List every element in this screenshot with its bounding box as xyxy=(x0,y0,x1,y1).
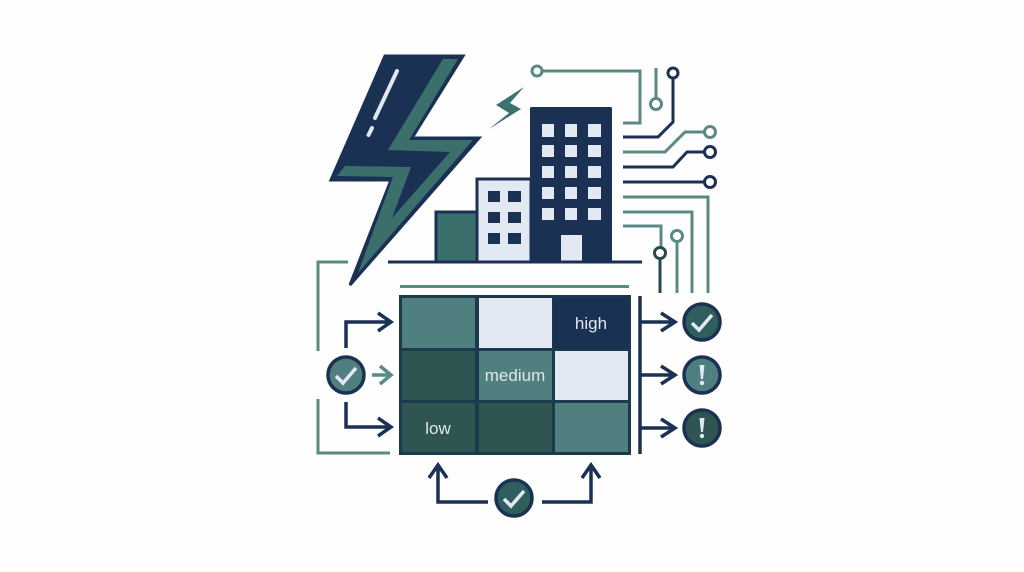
bottom loop: check and arrows xyxy=(429,465,600,516)
icon: check status xyxy=(684,304,720,340)
small green building xyxy=(436,212,477,262)
arrow: bottom left xyxy=(429,465,488,502)
arrow: low output xyxy=(640,419,675,437)
arrow: medium output xyxy=(640,366,675,384)
icon: city buildings xyxy=(388,107,642,262)
tall navy building xyxy=(530,107,612,262)
left bracket xyxy=(318,262,390,453)
label: high: high xyxy=(575,314,607,333)
icon: small lightning bolt xyxy=(489,87,524,129)
row 3 cells xyxy=(402,403,628,452)
arrow: to top row xyxy=(346,313,391,348)
row 2 cells xyxy=(402,351,628,400)
icon: bottom check xyxy=(496,480,532,516)
risk matrix xyxy=(399,295,631,455)
icon: left check xyxy=(328,357,364,393)
right vertical bar xyxy=(638,296,642,454)
circuit traces xyxy=(532,66,716,293)
right outputs: bar, arrows and status icons xyxy=(640,296,720,454)
arrow: bottom right xyxy=(542,465,600,502)
left inputs: check and arrows xyxy=(328,313,391,436)
label: low: low xyxy=(425,419,451,438)
label: medium: medium xyxy=(485,366,545,385)
row 1 cells xyxy=(402,297,629,349)
icon: large lightning bolt xyxy=(331,56,479,285)
arrow: to middle row xyxy=(372,366,391,384)
medium light building xyxy=(477,179,531,262)
icon: warning status medium xyxy=(684,357,720,393)
arrow: high output xyxy=(640,313,675,331)
ground line xyxy=(388,260,642,264)
divider above matrix xyxy=(400,285,629,288)
icon: warning status low xyxy=(684,410,720,446)
arrow: to bottom row xyxy=(346,402,391,436)
